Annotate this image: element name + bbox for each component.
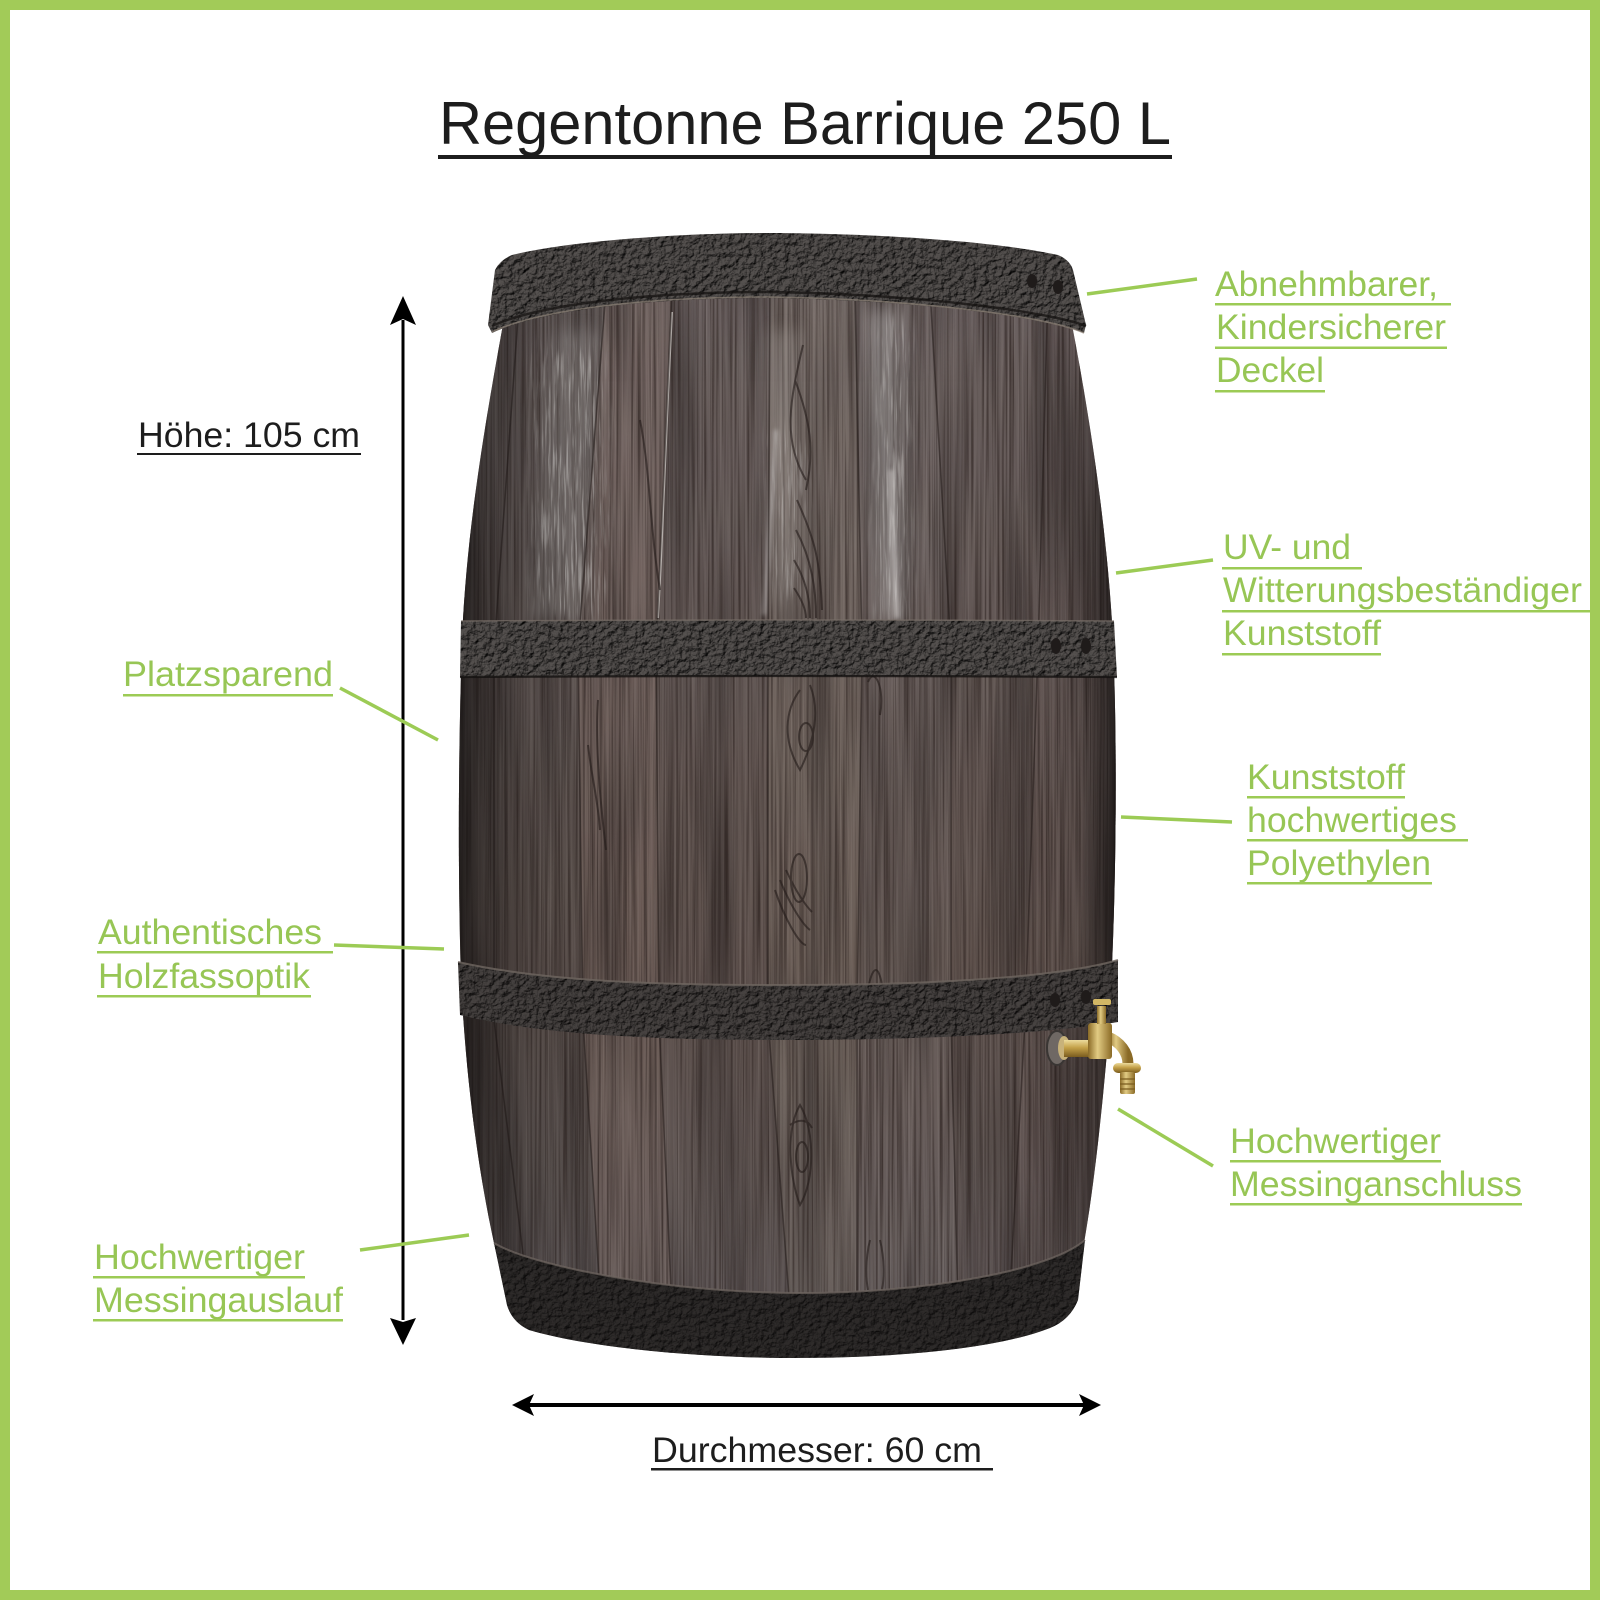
callout: lid: Kindersicherer	[1216, 308, 1446, 347]
callout: polyethylene: hochwertiges	[1247, 801, 1457, 840]
callout: lid	[1087, 265, 1451, 392]
callout: brass connection	[1118, 1109, 1522, 1206]
callout: lid: Abnehmbarer,	[1215, 265, 1438, 304]
callout: polyethylene: Polyethylen	[1247, 844, 1431, 883]
callout: wood look	[97, 913, 444, 998]
callout: UV resistant: Kunststoff	[1223, 614, 1381, 653]
callout: brass outlet: Messingauslauf	[94, 1281, 343, 1320]
callout: UV resistant: UV- und	[1223, 528, 1351, 567]
label: diameter: Durchmesser: 60 cm	[652, 1431, 982, 1470]
edge shading	[456, 290, 1120, 1320]
callout: UV resistant	[1116, 528, 1590, 656]
stave joints	[494, 290, 1048, 1310]
brass tap	[1047, 999, 1141, 1094]
wooden body with staves	[450, 290, 1130, 1320]
rain barrel illustration	[450, 233, 1141, 1358]
callout: brass outlet: Hochwertiger	[94, 1238, 305, 1277]
callout: wood look: Authentisches	[98, 913, 322, 952]
arrow: diameter	[512, 1394, 1101, 1416]
worn highlights on upper staves	[528, 310, 908, 620]
rivets	[1027, 274, 1091, 1007]
callout: polyethylene: Kunststoff	[1247, 758, 1405, 797]
callout: space saving	[123, 655, 438, 740]
callout: lid: Deckel	[1216, 351, 1324, 390]
metal band: base hoop	[494, 1240, 1085, 1358]
callout: brass connection: Messinganschluss	[1230, 1165, 1522, 1204]
callout: UV resistant: Witterungsbeständiger	[1223, 571, 1582, 610]
label: height: Höhe: 105 cm	[138, 416, 360, 455]
arrow: height	[390, 296, 416, 1345]
metal band: lower hoop	[458, 960, 1118, 1040]
callout: brass outlet	[93, 1235, 469, 1322]
callout: polyethylene	[1121, 758, 1468, 884]
metal band: removable lid	[488, 233, 1086, 333]
callout: wood look: Holzfassoptik	[98, 957, 311, 996]
callout: brass connection: Hochwertiger	[1230, 1122, 1441, 1161]
wood knots and flame grain	[588, 345, 884, 1290]
callout: space saving: Platzsparend	[123, 655, 333, 694]
metal band: upper hoop	[460, 620, 1117, 677]
title: Regentonne Barrique 250 L	[439, 90, 1171, 157]
